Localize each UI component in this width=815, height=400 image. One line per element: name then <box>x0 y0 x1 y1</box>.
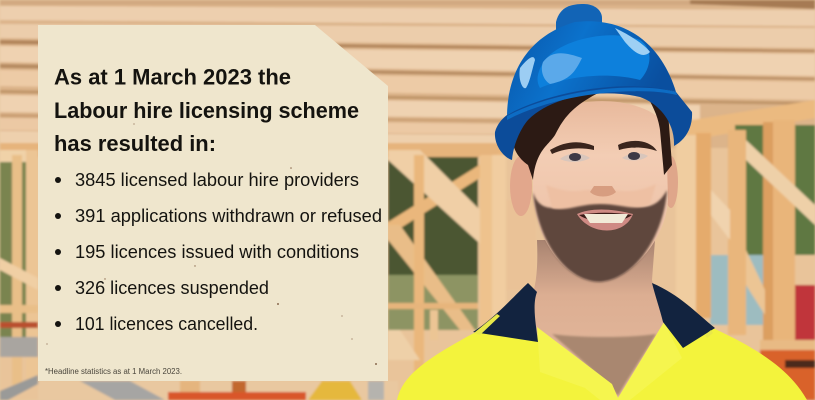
photo: smiling construction worker <box>397 4 807 400</box>
cheeks under beard <box>546 184 656 209</box>
nose shadow <box>590 186 616 196</box>
background greenery and gaps <box>0 157 38 337</box>
list item: cancelled: 101 licences cancelled. <box>75 313 258 334</box>
neck and chest <box>530 240 664 398</box>
lower site details <box>0 337 38 357</box>
list item: issued with conditions: 195 licences issued with conditions <box>75 241 359 262</box>
paper specks <box>46 123 377 365</box>
eyebrows <box>550 142 594 154</box>
list item: withdrawn or refused: 391 applications withdrawn or refused <box>75 205 382 226</box>
placket <box>537 322 682 400</box>
title <box>54 64 359 156</box>
left frame <box>0 150 38 162</box>
header beam <box>0 143 510 157</box>
mid frame <box>388 152 505 236</box>
left ear <box>510 156 532 216</box>
footnote: *Headline statistics as at 1 March 2023. <box>45 367 182 376</box>
bullet list: licensing statistics <box>55 169 382 334</box>
hi-vis polo shirt <box>397 320 807 400</box>
right frame <box>676 135 696 315</box>
title: has resulted in: <box>54 131 216 156</box>
navy collar <box>473 283 715 348</box>
list item: suspended: 326 licences suspended <box>75 277 269 298</box>
title: As at 1 March 2023 the <box>54 64 291 90</box>
chest hair <box>552 334 656 396</box>
mouth <box>577 210 633 230</box>
beard <box>533 190 667 282</box>
face <box>532 101 668 282</box>
roof battens <box>0 0 815 148</box>
eyes <box>560 152 648 162</box>
list item: licensed providers: 3845 licensed labour hire providers <box>75 169 359 190</box>
title: Labour hire licensing scheme <box>54 98 359 123</box>
right ear <box>664 156 678 208</box>
panel: parchment note with clipped corner <box>38 25 388 381</box>
blue hard hat <box>495 4 692 160</box>
hair <box>512 92 600 180</box>
